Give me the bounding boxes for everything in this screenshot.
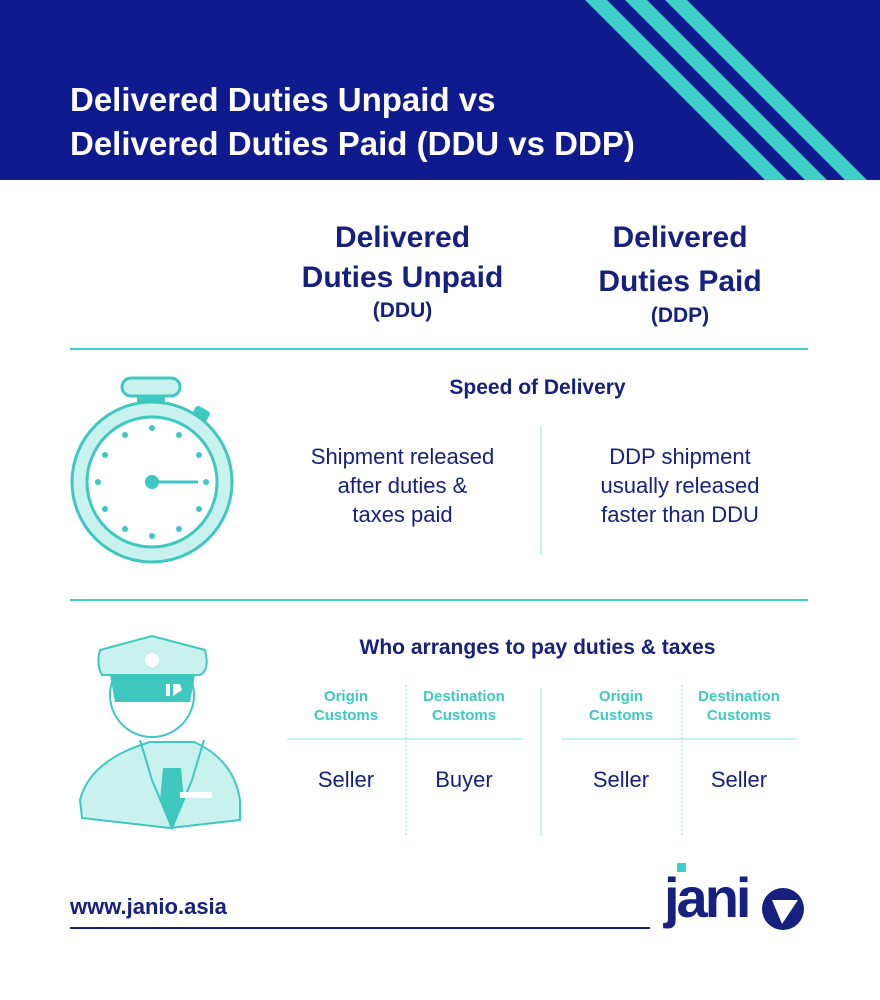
table DDP: Customs (707, 707, 771, 724)
title: Delivered Duties Paid (DDU vs DDP) (70, 125, 635, 162)
text: DDU speed (311, 444, 494, 527)
column heading DDP (598, 221, 762, 327)
column heading DDU (302, 221, 503, 322)
table DDU: Customs (314, 707, 378, 724)
column heading DDP: Delivered (612, 221, 748, 254)
column heading DDU: Duties Unpaid (302, 261, 503, 294)
table DDU: Buyer (435, 767, 493, 792)
decorative stripes (585, 0, 867, 180)
table DDP: Destination (698, 688, 780, 705)
column heading DDU: Delivered (335, 221, 470, 254)
section heading: who pays: Who arranges to pay duties & taxes (360, 636, 715, 659)
logo: janio (663, 863, 804, 930)
table DDU: Origin (324, 688, 368, 705)
text: DDP speed: faster than DDU (601, 502, 759, 527)
table DDP: Origin (599, 688, 643, 705)
logo: janio: jani (664, 866, 748, 929)
text: DDU speed: taxes paid (352, 502, 453, 527)
table DDP: Customs (589, 707, 653, 724)
table DDP (561, 685, 797, 835)
title (70, 81, 635, 162)
text: DDP speed: usually released (600, 473, 759, 498)
column heading DDP: Duties Paid (598, 265, 762, 298)
table DDP: Seller (593, 767, 649, 792)
column heading DDP: (DDP) (651, 304, 709, 327)
text: DDU speed: Shipment released (311, 444, 494, 469)
column heading DDU: (DDU) (373, 299, 432, 322)
section heading: speed: Speed of Delivery (449, 376, 626, 399)
icon: stopwatch (70, 376, 234, 564)
table DDU: Destination (423, 688, 505, 705)
text: DDU speed: after duties & (338, 473, 467, 498)
table DDU (287, 685, 523, 835)
text: DDP speed: DDP shipment (609, 444, 751, 469)
table DDU: Seller (318, 767, 374, 792)
footer url: www.janio.asia (70, 894, 227, 919)
title: Delivered Duties Unpaid vs (70, 81, 495, 118)
text: DDP speed (600, 444, 759, 527)
icon: customs officer (79, 635, 241, 830)
table DDP: Seller (711, 767, 767, 792)
table DDU: Customs (432, 707, 496, 724)
header banner (0, 0, 880, 180)
